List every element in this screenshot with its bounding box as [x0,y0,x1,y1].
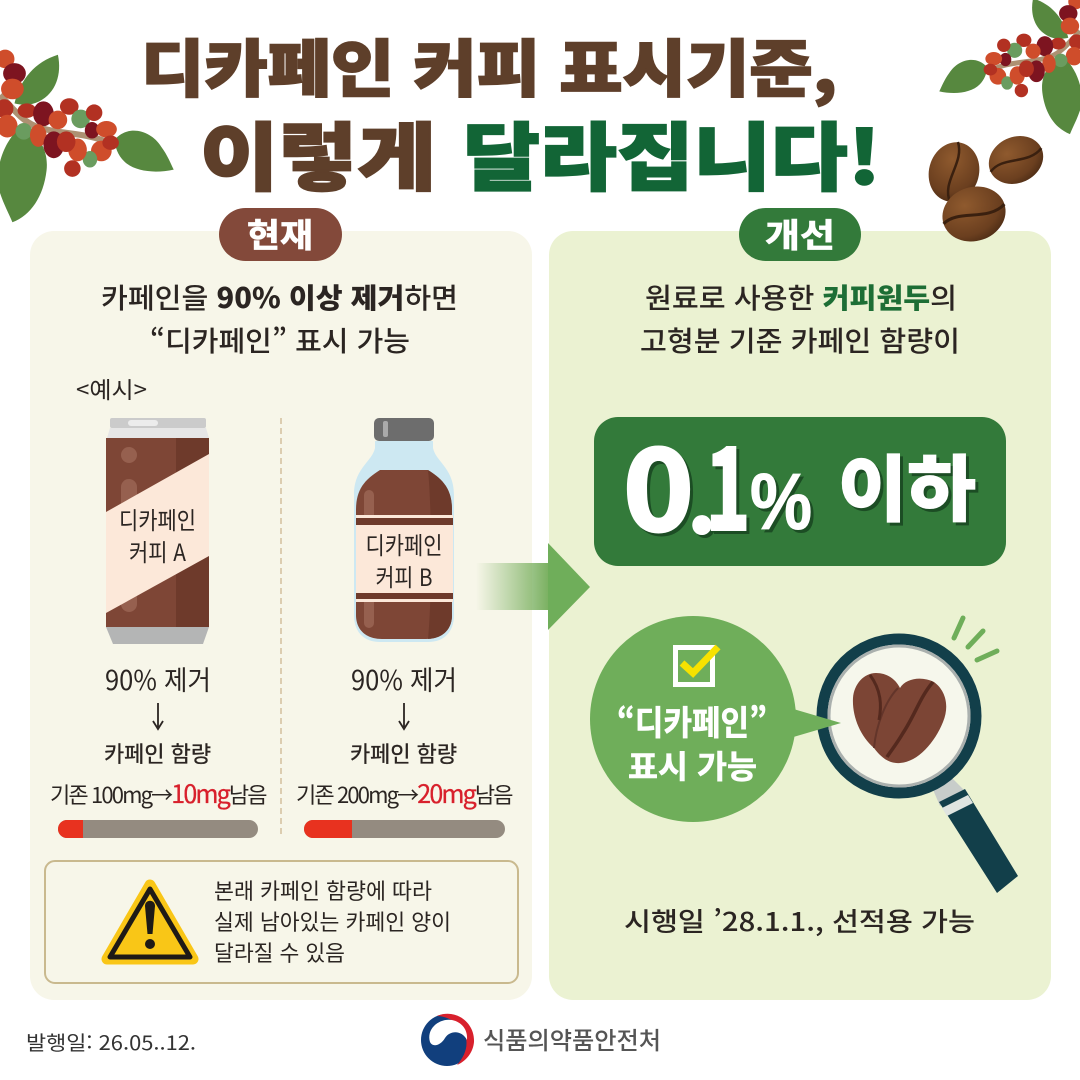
title [141,19,881,206]
callout: warning note [45,861,518,983]
icon: warning triangle [107,885,193,959]
text block: product B calculation: 카페인 함량 [350,737,457,769]
icon: bottle B: 디카페인 [366,526,442,561]
decoration: coffee branch left [0,50,174,222]
decoration: coffee branch right [939,0,1080,134]
text block: product B calculation: 90% 제거 [351,659,457,698]
callout: 0.1% or less: % [750,457,812,546]
badge: improved: 개선 [765,209,835,257]
badge: current [219,208,342,261]
callout: 0.1% or less: % [753,460,815,549]
callout: 0.1% or less: 이하 [841,434,979,539]
heading: current rule [101,277,458,360]
title: 디카페인 커피 표시기준, [141,19,837,109]
logo: Ministry of Food and Drug Safety [421,1014,661,1066]
callout: 0.1% or less: . [686,428,718,558]
label: example: <예시> [76,371,147,405]
text: warning message: 본래 카페인 함량에 따라 [214,874,432,906]
icon: can A [106,418,209,644]
icon: can A: 디카페인 [119,501,196,536]
text: publication date: 발행일: 26.05..12. [26,1027,196,1056]
callout: 0.1% or less: 1 [705,399,751,564]
text block: product A calculation [50,659,267,811]
title: 달라집니다! [463,99,881,206]
callout: 0.1% or less: . [689,431,721,561]
callout: 0.1% or less: 1 [708,402,754,567]
icon: coffee beans [922,127,1051,250]
callout: decaf label allowed: “디카페인” [617,696,767,745]
text block: product B calculation [296,659,513,811]
panel: improved [549,208,1051,1000]
icon: magnifier [822,618,1018,893]
text block: product B calculation: 기존 200mg→20mg남음 [296,775,513,811]
text: warning message: 달라질 수 있음 [214,936,345,968]
callout: 0.1% or less: 0 [622,400,695,565]
heading: current rule: “디카페인” 표시 가능 [150,320,410,360]
heading: improved rule: 원료로 사용한 커피원두의 [645,277,957,317]
callout: 0.1% or less [594,399,1006,568]
text block: product A calculation: 기존 100mg→10mg남음 [50,775,267,811]
icon: bottle B: 커피 B [376,558,432,593]
badge: current: 현재 [247,209,313,257]
callout: 0.1% or less: 0 [625,403,698,568]
callout: 0.1% or less: 이하 [838,431,976,536]
text: effective date: 시행일 ’28.1.1., 선적용 가능 [624,902,975,939]
title: 이렇게 [200,99,436,206]
callout: decaf label allowed: 표시 가능 [628,742,757,788]
heading: improved rule [640,277,960,360]
icon: bottle B [354,418,454,642]
heading: current rule: 카페인을 90% 이상 제거 하면 [101,277,458,317]
text: warning message [214,874,451,968]
logo: Ministry of Food and Drug Safety: 식품의약품안전처 [483,1021,661,1056]
badge: improved [739,208,861,261]
text block: product A calculation: 90% 제거 [105,659,211,698]
text block: product A calculation: 카페인 함량 [104,737,211,769]
panel: current [30,208,532,1000]
bar chart: product B remaining [304,820,505,838]
bar chart: product A remaining [58,820,258,838]
arrow [476,543,590,630]
text: warning message: 실제 남아있는 카페인 양이 [214,905,451,937]
heading: improved rule: 고형분 기준 카페인 함량이 [640,320,960,360]
callout: decaf label allowed [590,616,841,822]
icon: checkbox [676,647,718,684]
icon: can A: 커피 A [129,533,186,568]
